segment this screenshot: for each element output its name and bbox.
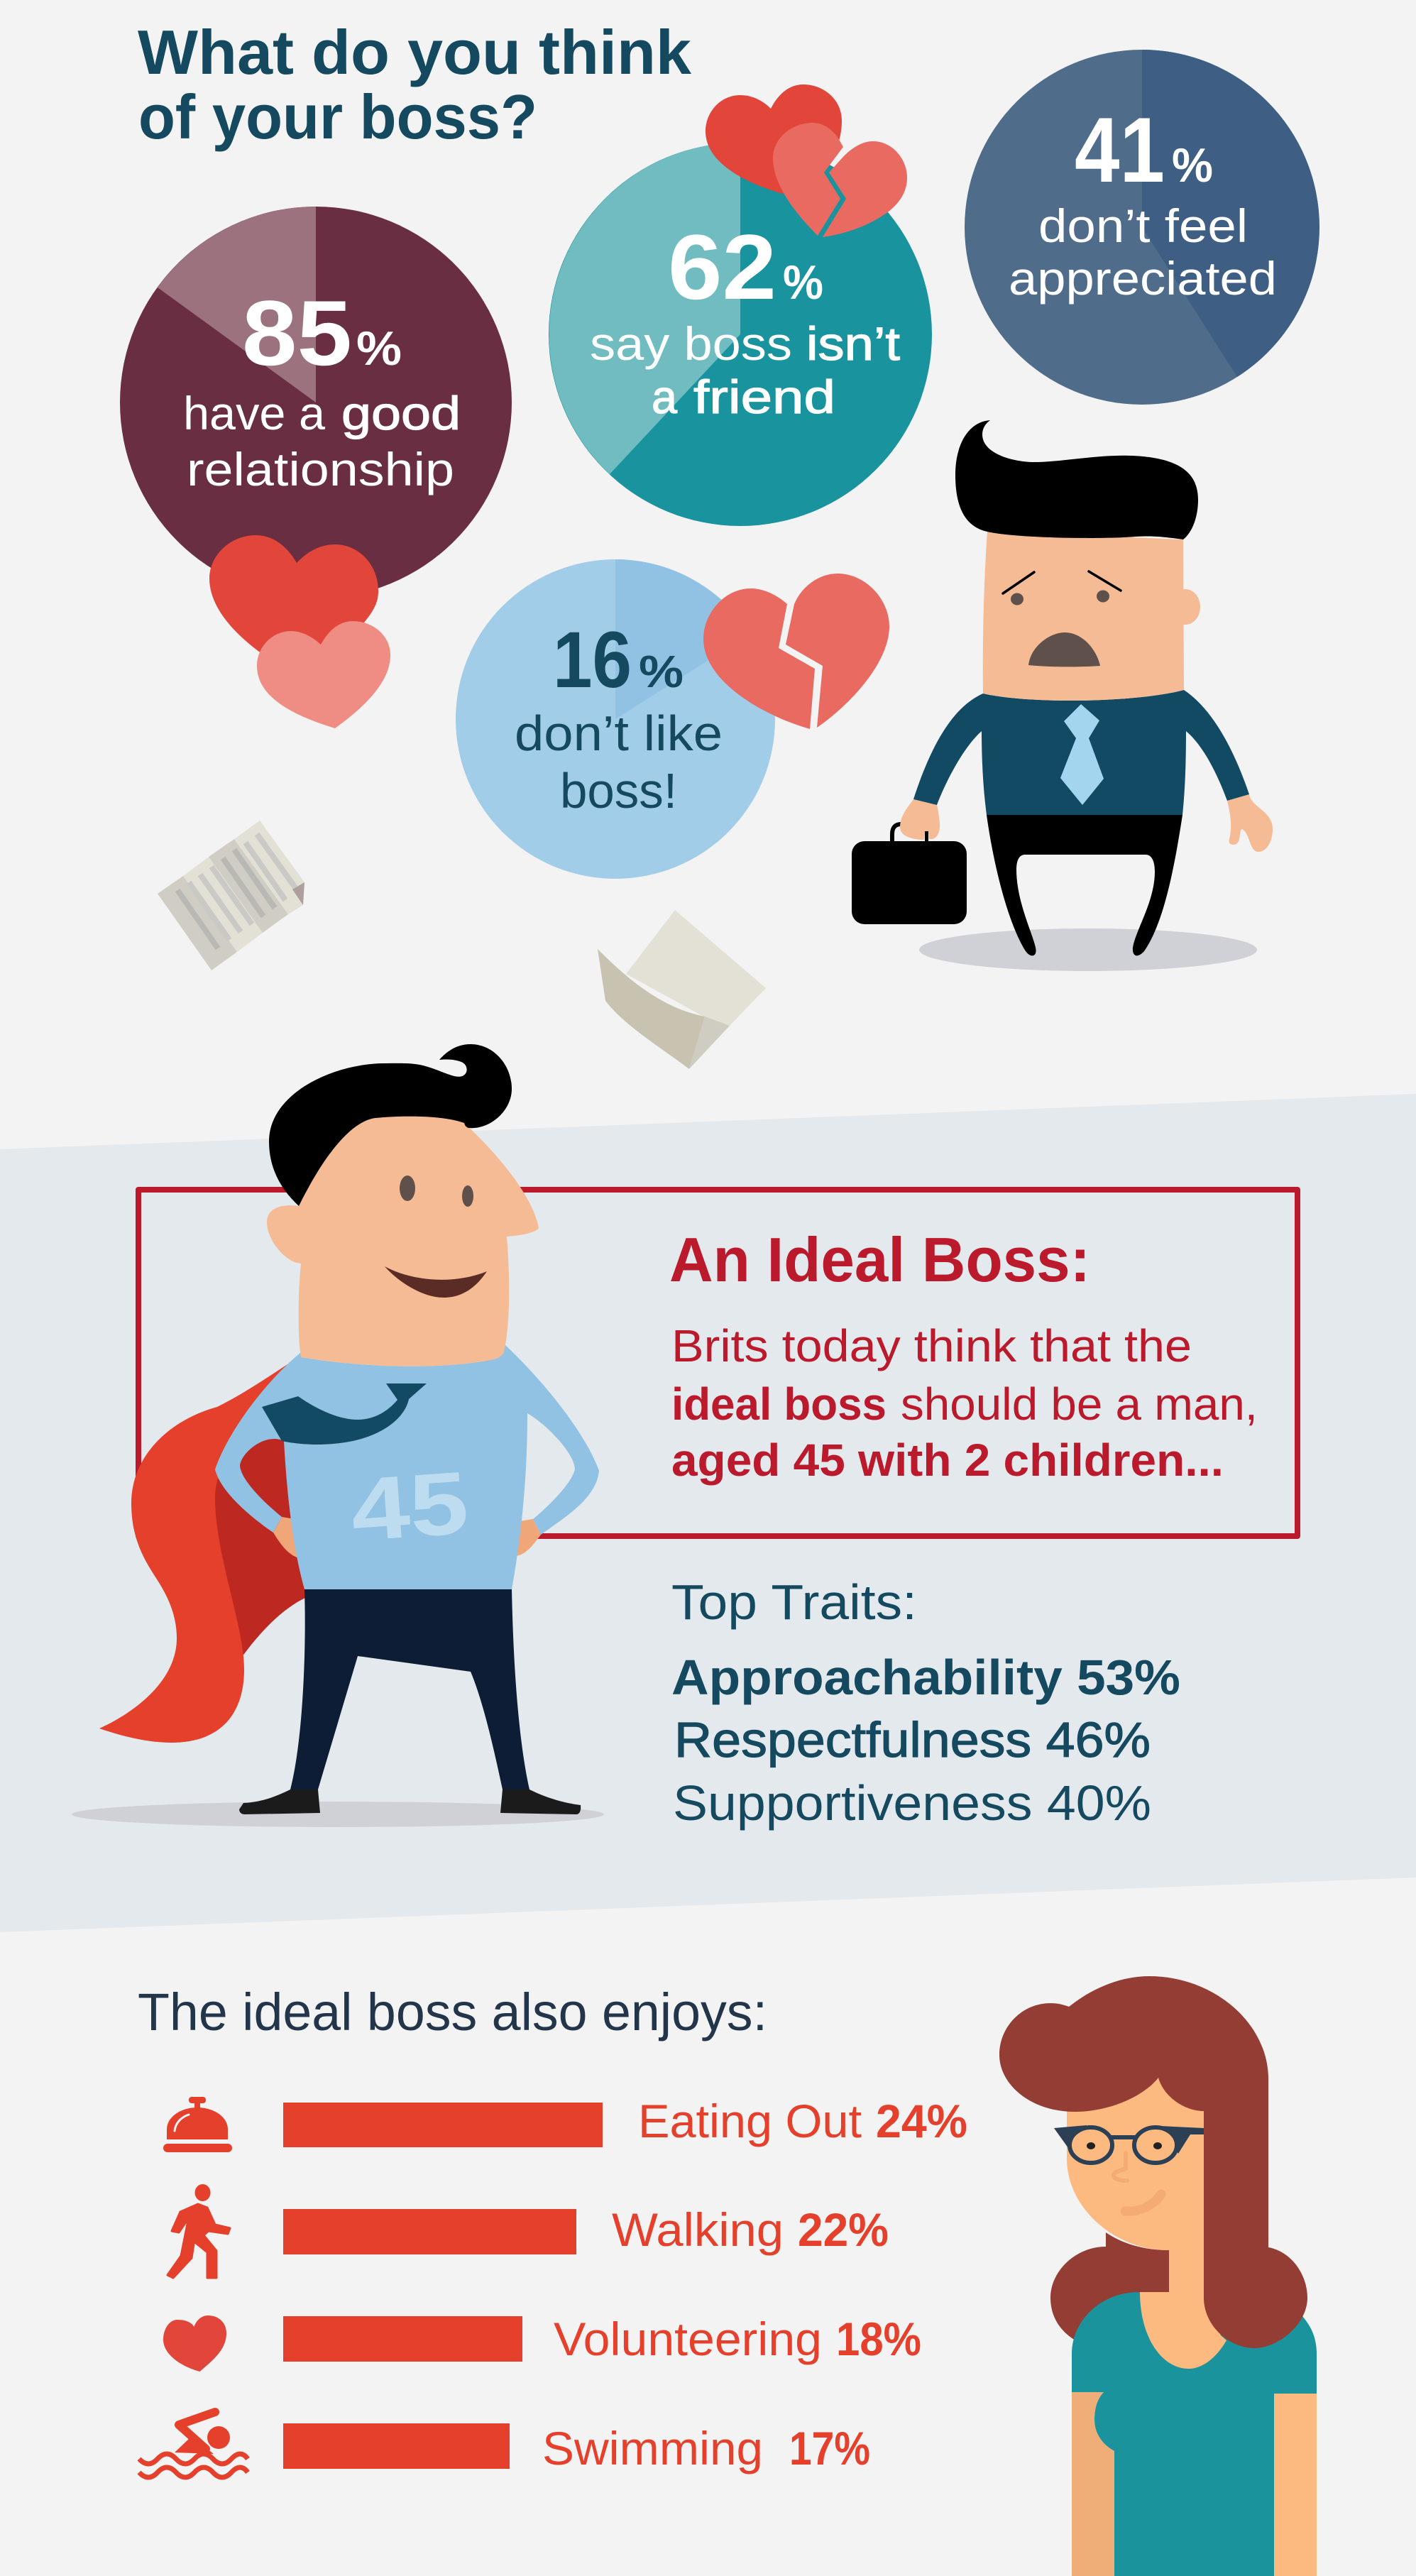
cape (99, 1363, 307, 1743)
neck and neckline (1140, 2247, 1226, 2369)
label: walking 22%: 22% (798, 2203, 889, 2256)
icon: service bell (163, 2097, 232, 2152)
text: ideal boss description: should be a man, (901, 1379, 1258, 1430)
shirt number 45: 45 (348, 1453, 471, 1560)
label: eating out 24% (638, 2095, 967, 2147)
stat: 85%: 85 (242, 281, 352, 385)
label: don't feel appreciated: don’t feel (1038, 199, 1248, 252)
label: don't like boss!: boss! (560, 763, 677, 818)
panel: 41% pie (965, 50, 1319, 405)
hair (955, 420, 1198, 539)
head (983, 532, 1200, 701)
illustration: woman with glasses (999, 1976, 1317, 2576)
label: have a good relationship: good (341, 387, 461, 439)
shirt (1072, 2292, 1317, 2576)
bar: swimming (283, 2423, 510, 2469)
hair (999, 1976, 1307, 2348)
hair (269, 1044, 512, 1206)
label: don't feel appreciated (1009, 199, 1277, 305)
stat: 41%: % (1172, 138, 1213, 192)
back hair (1050, 2232, 1169, 2340)
label: have a good relationship: have a (183, 387, 325, 439)
glasses (1054, 2125, 1204, 2163)
stat: 62%: % (783, 256, 823, 309)
illustration: sad boss (852, 420, 1273, 971)
label: walking 22% (612, 2203, 889, 2256)
title (138, 17, 692, 152)
label: say boss isn't a friend: isn’t (806, 317, 900, 370)
shadow (919, 928, 1257, 971)
icon: heart and broken heart (706, 84, 907, 237)
bar: eating out (283, 2103, 603, 2147)
face (1067, 2059, 1207, 2250)
text: top traits (671, 1574, 1180, 1831)
icon: heart (163, 2315, 226, 2372)
label: have a good relationship: relationship (187, 443, 454, 495)
stat: 16%: % (639, 646, 684, 697)
pants (987, 815, 1182, 955)
label: don't feel appreciated: appreciated (1009, 252, 1277, 305)
text: top traits: Supportiveness 40% (673, 1775, 1151, 1831)
face: worried (1003, 571, 1121, 667)
label: say boss isn't a friend: friend (693, 371, 835, 423)
hands (900, 794, 1273, 852)
panel: 85% pie (120, 207, 512, 728)
label: swimming 17% (542, 2422, 870, 2474)
tie (1060, 704, 1104, 805)
nose and smile (1114, 2153, 1161, 2211)
stat: 41%: 41 (1075, 98, 1165, 202)
icon: two hearts (209, 535, 390, 728)
label: say boss isn't a friend (590, 317, 900, 423)
text: ideal boss heading: An Ideal Boss: (669, 1224, 1090, 1295)
scarf (262, 1383, 427, 1445)
text: ideal boss description (671, 1320, 1258, 1486)
text: ideal boss description: Brits today think that the (671, 1320, 1192, 1371)
shoes (239, 1790, 581, 1814)
panel: 16% pie (456, 559, 889, 879)
arms (1072, 2392, 1317, 2576)
icon: swimmer (139, 2412, 248, 2477)
hands (273, 1517, 541, 1558)
stat: 85%: % (356, 322, 402, 376)
callout box: ideal boss (138, 1190, 1297, 1536)
label: walking 22%: Walking (612, 2203, 784, 2256)
label: volunteering 18%: Volunteering (554, 2313, 822, 2365)
label: eating out 24%: 24% (876, 2095, 967, 2147)
label: don't like boss!: don’t like (515, 706, 723, 761)
icon: broken heart (703, 574, 889, 729)
illustration: superhero boss (72, 1044, 604, 1827)
label: eating out 24%: Eating Out (638, 2095, 862, 2147)
head (267, 1117, 539, 1366)
label: say boss isn't a friend: say boss (590, 317, 792, 370)
label: volunteering 18%: 18% (836, 2313, 921, 2365)
pie: 41 percent (965, 50, 1319, 405)
text: ideal boss description: ideal boss (671, 1379, 887, 1430)
bar: volunteering (283, 2316, 522, 2362)
shirt (913, 690, 1249, 815)
label: swimming 17%: Swimming (542, 2422, 763, 2474)
title: What do you think (138, 17, 692, 87)
stat: 85% (242, 281, 402, 385)
pie: 16 percent (456, 559, 775, 879)
shirt (215, 1344, 599, 1589)
face: smiling (385, 1175, 487, 1298)
stat: 16%: 16 (553, 615, 632, 704)
text: ideal boss description: aged 45 with 2 children... (671, 1435, 1224, 1486)
panel: 62% pie (549, 84, 932, 526)
stat: 62%: 62 (668, 215, 776, 319)
label: swimming 17%: 17% (789, 2422, 870, 2474)
text: top traits: Top Traits: (671, 1574, 917, 1630)
label: have a good relationship (183, 387, 461, 495)
heading: the ideal boss also enjoys: The ideal boss also enjoys: (138, 1983, 767, 2041)
pie: 62 percent (549, 143, 932, 526)
pie: 85 percent (120, 207, 512, 598)
briefcase (852, 824, 967, 924)
label: don't like boss! (515, 706, 723, 818)
shadow (72, 1802, 604, 1827)
stat: 16% (553, 615, 684, 704)
title: of your boss? (138, 82, 537, 152)
icon: fallen document (158, 821, 304, 970)
text: top traits: Respectfulness 46% (674, 1712, 1151, 1767)
pants (290, 1589, 529, 1790)
icon: walking person (168, 2184, 230, 2278)
text: top traits: Approachability 53% (671, 1650, 1180, 1705)
icon: curled paper (598, 910, 766, 1069)
label: say boss isn't a friend: a (652, 371, 677, 423)
stat: 62% (668, 215, 823, 319)
bar: walking (283, 2209, 576, 2254)
